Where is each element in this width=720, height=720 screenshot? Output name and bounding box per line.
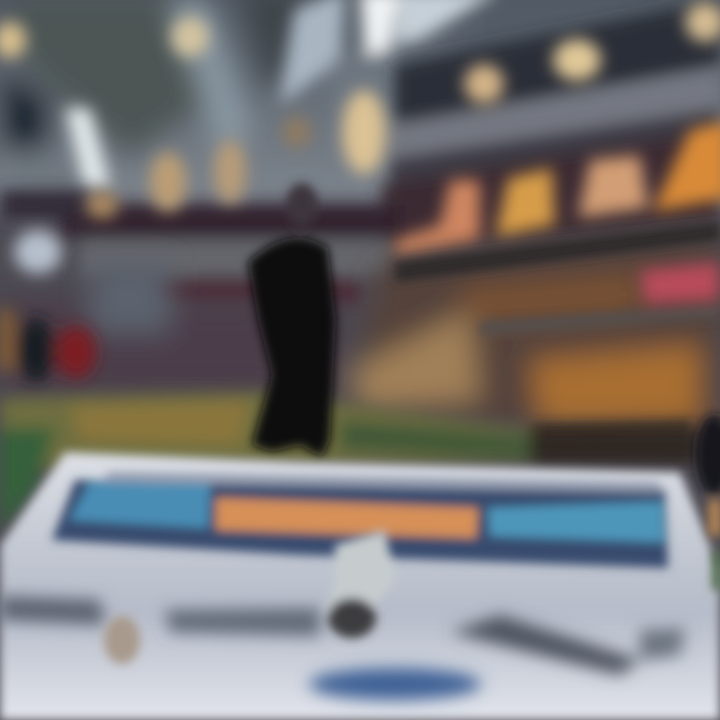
orange stand panels <box>395 120 720 258</box>
red and pink accents <box>0 262 720 382</box>
board lower lines <box>0 596 685 700</box>
tactic board paper <box>0 452 720 720</box>
board header stripes <box>52 472 668 568</box>
ceiling <box>0 0 720 210</box>
pitch <box>0 392 700 530</box>
skylights <box>65 0 500 190</box>
dark corner object <box>696 415 720 590</box>
lower stands <box>0 235 720 440</box>
stand rails <box>395 222 720 445</box>
silhouette figure <box>248 183 336 458</box>
marker pieces <box>104 530 395 664</box>
ceiling lights <box>0 2 720 274</box>
upper stand band <box>0 0 720 304</box>
